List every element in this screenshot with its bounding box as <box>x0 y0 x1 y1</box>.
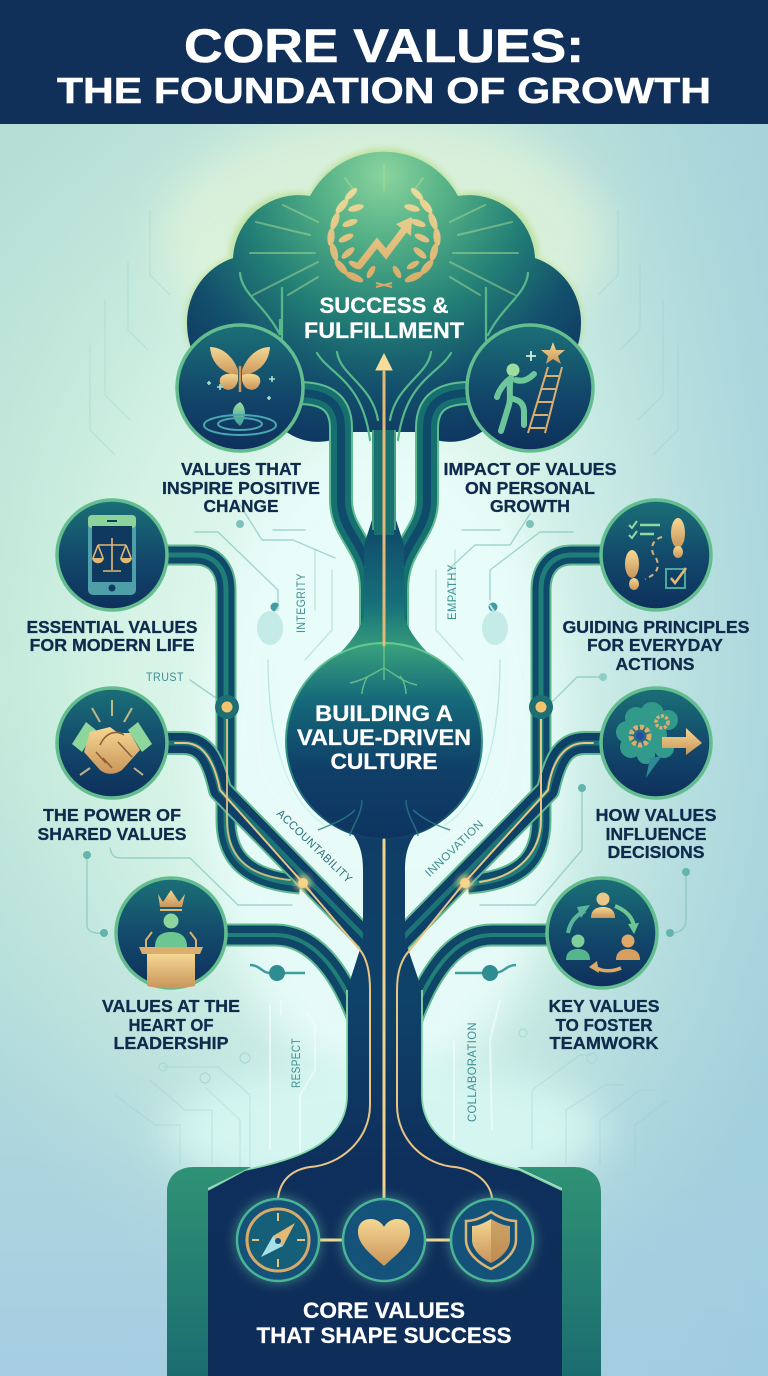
root block: core values <box>167 1167 601 1376</box>
node: key values to foster teamwork <box>547 878 657 988</box>
label: guiding principles for everyday actions <box>562 617 750 674</box>
label: essential values for modern life: FOR MODERN LIFE <box>30 635 194 655</box>
label: the power of shared values: SHARED VALUES <box>38 824 186 844</box>
label: values at the heart of leadership: VALUES AT THE <box>102 996 240 1016</box>
label: essential values for modern life <box>26 617 198 655</box>
core circle: building a value-driven culture: CULTURE <box>330 749 438 774</box>
crown title: SUCCESS & <box>320 293 449 318</box>
icon: climber and ladder <box>497 342 565 433</box>
label: essential values for modern life: ESSENTIAL VALUES <box>26 617 198 637</box>
label: guiding principles for everyday actions: GUIDING PRINCIPLES <box>562 617 750 637</box>
crown rays <box>250 165 518 295</box>
connectors between core icons <box>320 1238 450 1242</box>
node: the power of shared values <box>57 688 167 798</box>
pipes: lower branches <box>165 555 603 1030</box>
label: values that inspire positive change <box>162 459 320 516</box>
icon: heart <box>341 1197 427 1283</box>
icon: laurel wreath and rising arrow <box>327 186 441 287</box>
label: values that inspire positive change: INSPIRE POSITIVE <box>162 478 320 498</box>
small value tags: INTEGRITY <box>296 573 308 633</box>
node: values at the heart of leadership <box>116 878 226 988</box>
small value tags: INNOVATION <box>423 818 486 880</box>
knot connector right <box>455 965 516 981</box>
root title <box>256 1298 512 1348</box>
label: the power of shared values: THE POWER OF <box>43 805 181 825</box>
gold junction nodes <box>215 695 553 891</box>
label: impact of values on personal growth: GROWTH <box>490 496 570 516</box>
circuit lines <box>83 210 690 1170</box>
small value tags: COLLABORATION <box>467 1022 479 1122</box>
node: impact of values on personal growth <box>467 325 593 451</box>
small value tags: TRUST <box>146 672 184 684</box>
network: value pipes <box>165 354 603 1376</box>
icon: leader at podium with crown <box>139 890 203 988</box>
core circle: building a value-driven culture: VALUE-DRIVEN <box>297 725 471 750</box>
node: values that inspire positive change <box>177 325 303 451</box>
label: values at the heart of leadership <box>102 996 240 1053</box>
header band with title <box>0 0 768 124</box>
label: how values influence decisions: HOW VALUES <box>596 805 716 825</box>
pipes: upper branches <box>298 393 470 650</box>
label: impact of values on personal growth <box>444 459 616 516</box>
label: impact of values on personal growth: ON PERSONAL <box>465 478 595 498</box>
knot connector left <box>250 965 305 981</box>
header band with title: THE FOUNDATION OF GROWTH <box>57 70 711 111</box>
icon: handshake <box>72 700 152 775</box>
label: impact of values on personal growth: IMPACT OF VALUES <box>444 459 616 479</box>
label: key values to foster teamwork <box>548 996 660 1053</box>
label: key values to foster teamwork: TEAMWORK <box>550 1033 659 1053</box>
label: values at the heart of leadership: HEART OF <box>128 1015 214 1035</box>
crown twigs <box>240 273 528 440</box>
icon: phone with scales <box>88 515 136 595</box>
label: values that inspire positive change: VALUES THAT <box>181 459 301 479</box>
icon: compass <box>235 1197 321 1283</box>
label: guiding principles for everyday actions: ACTIONS <box>616 654 694 674</box>
gold energy lines <box>175 372 593 1198</box>
arrow head <box>376 354 392 370</box>
node: guiding principles for everyday actions <box>601 500 711 610</box>
label: key values to foster teamwork: KEY VALUES <box>548 996 660 1016</box>
trunk lower and root flare <box>208 825 562 1376</box>
label: how values influence decisions <box>596 805 716 862</box>
icon: footsteps and checklist <box>625 518 686 590</box>
small value tags: ACCOUNTABILITY <box>274 808 354 886</box>
icon: shield <box>449 1197 535 1283</box>
node: essential values for modern life <box>57 500 167 610</box>
icon: butterfly over ripples <box>204 347 276 435</box>
label: how values influence decisions: DECISIONS <box>608 842 704 862</box>
header band with title: CORE VALUES: <box>184 19 584 72</box>
label: key values to foster teamwork: TO FOSTER <box>556 1015 653 1035</box>
icon: three people in a cycle <box>566 892 640 973</box>
label: the power of shared values <box>38 805 186 844</box>
label: values at the heart of leadership: LEADERSHIP <box>114 1033 229 1053</box>
small value tags: RESPECT <box>291 1038 303 1088</box>
crown: success and fulfillment <box>185 148 583 442</box>
label: values that inspire positive change: CHANGE <box>204 496 278 516</box>
core circle: building a value-driven culture: BUILDING A <box>315 701 453 726</box>
small value tags: EMPATHY <box>447 564 459 620</box>
root title: CORE VALUES <box>303 1298 465 1323</box>
label: guiding principles for everyday actions: FOR EVERYDAY <box>587 635 723 655</box>
crown title: FULFILLMENT <box>304 318 465 343</box>
upper trunk and center column <box>333 430 435 660</box>
label: how values influence decisions: INFLUENCE <box>606 824 706 844</box>
core glow <box>280 637 488 845</box>
icon: brain, gears and arrow <box>616 702 702 778</box>
core circle: building a value-driven culture <box>286 640 482 839</box>
crown title <box>304 293 465 343</box>
node: how values influence decisions <box>601 688 711 798</box>
root title: THAT SHAPE SUCCESS <box>256 1323 512 1348</box>
small value tags <box>146 564 486 1122</box>
